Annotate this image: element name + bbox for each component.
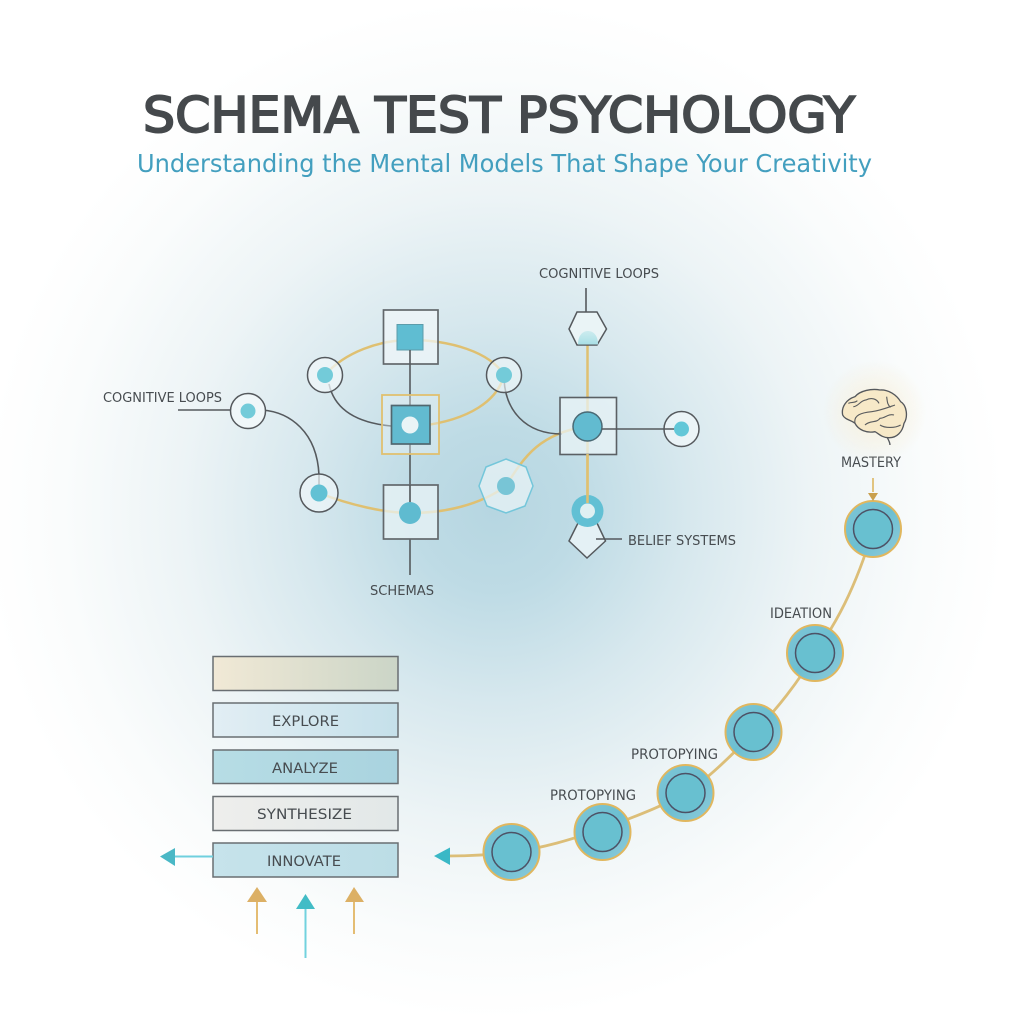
gold connectors — [319, 340, 588, 513]
schema network diagram — [178, 288, 699, 575]
label: schemas: SCHEMAS — [370, 584, 434, 599]
hexagon node — [569, 312, 606, 345]
dark connectors — [178, 288, 586, 575]
arrow: gold up right — [345, 887, 364, 934]
stage node 4 — [726, 704, 782, 760]
square hub node — [560, 398, 616, 454]
stage node 3 — [658, 765, 714, 821]
stacked process panel — [213, 656, 398, 877]
icon: brain — [823, 360, 927, 464]
path curve — [448, 530, 873, 856]
ring node — [572, 454, 604, 527]
stage node 6 — [845, 501, 901, 557]
label: ideation: IDEATION — [770, 606, 832, 622]
square node: centre — [382, 395, 439, 454]
label: protoyping upper: PROTOPYING — [631, 747, 718, 763]
stage node 2 — [574, 804, 630, 860]
arrow: gold up left — [247, 887, 267, 934]
empty bar — [213, 656, 398, 690]
title: SCHEMA TEST PSYCHOLOGY — [143, 87, 856, 144]
bar: synthesize — [213, 796, 398, 830]
circle node: far left — [230, 394, 266, 428]
mastery pathway — [434, 501, 901, 880]
octagon node — [479, 459, 533, 513]
label: mastery: MASTERY — [841, 455, 901, 471]
arrow: into mastery node — [868, 478, 878, 501]
label: protoyping lower: PROTOPYING — [550, 788, 636, 804]
label: cognitive loops left: COGNITIVE LOOPS — [103, 391, 222, 406]
label: belief systems: BELIEF SYSTEMS — [628, 534, 736, 549]
circle node: right — [602, 412, 699, 446]
label: cognitive loops top: COGNITIVE LOOPS — [539, 267, 659, 282]
arrow: left output — [160, 848, 213, 866]
square node: top — [384, 310, 438, 364]
bar: synthesize: SYNTHESIZE — [257, 807, 352, 823]
square node: bottom — [384, 485, 438, 539]
arrowhead — [434, 848, 450, 865]
circle node: upper right — [486, 358, 522, 392]
bar: explore — [213, 703, 398, 737]
bar: innovate: INNOVATE — [267, 854, 341, 870]
circle node: lower left — [300, 474, 338, 512]
subtitle: Understanding the Mental Models That Shape Your Creativity — [137, 149, 872, 178]
pentagon node — [569, 523, 622, 558]
bar: innovate — [213, 843, 398, 877]
stage node 1 — [484, 824, 540, 880]
stage node 5 — [787, 625, 843, 681]
bar: analyze: ANALYZE — [272, 761, 338, 777]
arrow: teal up — [296, 894, 315, 958]
circle node: upper left — [308, 358, 342, 392]
bar: explore: EXPLORE — [272, 714, 339, 730]
bar: analyze — [213, 750, 398, 784]
